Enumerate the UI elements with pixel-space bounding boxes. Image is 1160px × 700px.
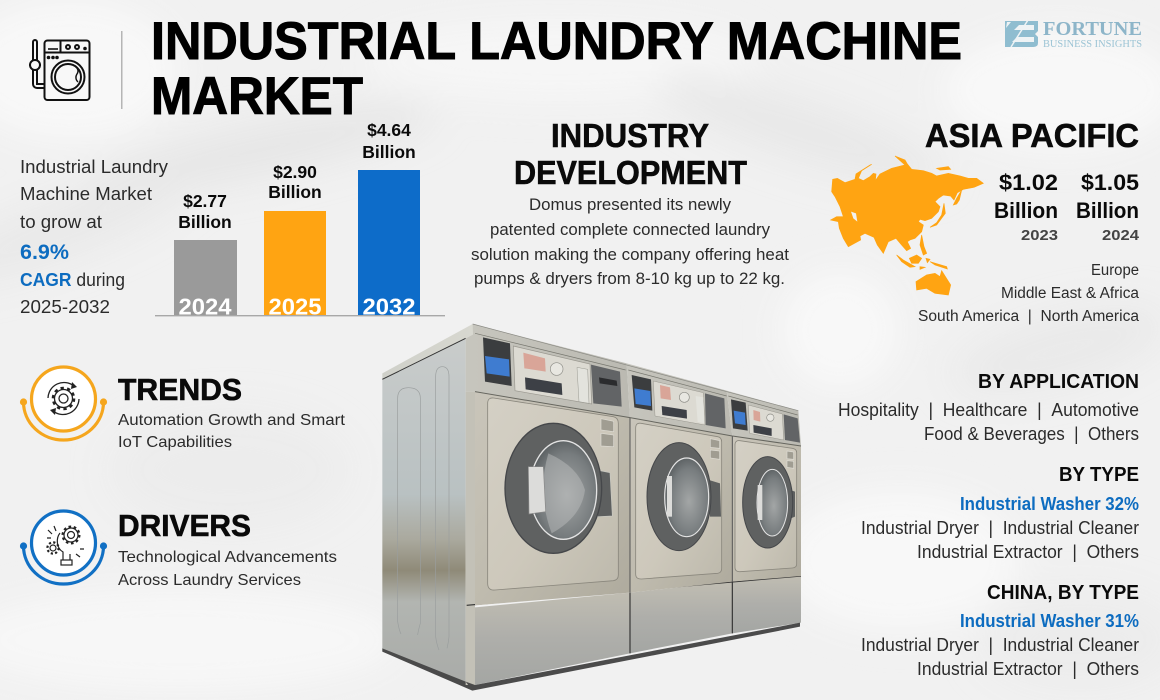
text block: market growth: Machine Market — [20, 184, 152, 204]
stat: asia pacific 2024: 2024 — [1102, 227, 1140, 244]
bar: 2032 — [358, 120, 420, 320]
panel: by application: BY APPLICATION — [978, 371, 1139, 393]
illustration: industrial washing machines — [382, 324, 801, 691]
text block: trends — [118, 412, 346, 451]
logo: Fortune Business Insights: FORTUNE — [1043, 18, 1142, 40]
bar: 2025: $2.90 — [273, 162, 317, 182]
title: INDUSTRIAL LAUNDRY MACHINE — [151, 12, 962, 71]
washer base plinth — [466, 576, 801, 691]
text block: industry development: pumps & dryers from 8-10 kg up to 22 kg. — [474, 270, 785, 288]
stat: asia pacific 2023 — [994, 170, 1058, 244]
stat: asia pacific 2023: $1.02 — [999, 170, 1058, 195]
heading: industry development: INDUSTRY — [551, 117, 709, 154]
panel: by application: Food & Beverages | Others — [924, 424, 1139, 444]
text block: other regions: Middle East & Africa — [1001, 285, 1139, 302]
panel: china by type: CHINA, BY TYPE — [987, 582, 1139, 604]
heading: industry development: DEVELOPMENT — [514, 154, 747, 191]
bar: 2025: 2025 — [268, 294, 322, 320]
panel: by type: Industrial Extractor | Others — [917, 542, 1139, 562]
title divider — [121, 31, 122, 109]
bar: 2024: 2024 — [178, 294, 232, 320]
title — [151, 12, 962, 126]
stat: asia pacific 2023: Billion — [994, 198, 1058, 223]
title: MARKET — [151, 67, 363, 126]
logo: Fortune Business Insights: BUSINESS INSIGHTS — [1043, 38, 1142, 50]
bar: 2032: Billion — [362, 142, 416, 162]
washer door 1 — [505, 423, 612, 553]
logo: Fortune Business Insights — [1005, 18, 1142, 50]
stat: asia pacific 2024 — [1076, 170, 1140, 244]
text block: other regions — [918, 262, 1139, 325]
panel: china by type: Industrial Dryer | Industrial Cleaner — [861, 635, 1139, 655]
bar: 2024: Billion — [178, 212, 232, 232]
stat: asia pacific 2024: Billion — [1076, 198, 1139, 223]
text block: drivers: Technological Advancements — [118, 549, 337, 566]
text block: market growth: to grow at — [20, 212, 102, 232]
text block: industry development — [471, 196, 789, 288]
text block: industry development: solution making the company offering heat — [471, 246, 789, 264]
bar: 2032: 2032 — [362, 294, 416, 320]
icon: trends — [20, 367, 107, 440]
panel: china by type: Industrial Washer 31% — [960, 611, 1139, 631]
text block: trends: Automation Growth and Smart — [118, 412, 346, 429]
bar: 2024: $2.77 — [183, 191, 227, 211]
text block: trends: IoT Capabilities — [118, 434, 232, 451]
text block: market growth: CAGR during — [20, 270, 125, 290]
text block: industry development: patented complete connected laundry — [490, 221, 771, 239]
text block: drivers: Across Laundry Services — [118, 572, 301, 589]
heading: trends: TRENDS — [118, 372, 242, 407]
heading: drivers: DRIVERS — [118, 508, 251, 543]
washer cabinet side — [382, 324, 475, 691]
heading: industry development — [514, 117, 747, 191]
stat: asia pacific 2024: $1.05 — [1081, 170, 1139, 195]
washer control panels — [473, 324, 801, 468]
text block: other regions: South America | North America — [918, 308, 1139, 325]
panel: china by type: Industrial Extractor | Others — [917, 659, 1139, 679]
text block: drivers — [118, 549, 337, 589]
stat: asia pacific 2023: 2023 — [1021, 227, 1058, 244]
washer door 3 — [743, 457, 795, 548]
text block: market growth: 6.9% — [20, 241, 69, 264]
icon: drivers — [20, 511, 107, 584]
icon: washing machine — [29, 40, 90, 100]
bar: 2025: Billion — [268, 182, 322, 202]
heading: asia pacific: ASIA PACIFIC — [925, 117, 1139, 154]
bar: 2024 — [174, 191, 237, 320]
washer door 2 — [647, 443, 721, 551]
bar: 2025 — [264, 162, 326, 320]
text block: industry development: Domus presented its newly — [529, 196, 732, 214]
panel: by application — [838, 371, 1139, 444]
panel: china by type — [861, 582, 1139, 679]
panel: by type: BY TYPE — [1059, 464, 1139, 486]
text block: market growth — [20, 157, 168, 317]
text block: other regions: Europe — [1091, 262, 1139, 279]
panel: by type: Industrial Dryer | Industrial Cleaner — [861, 518, 1139, 538]
text block: market growth: Industrial Laundry — [20, 157, 168, 177]
text block: market growth: 2025-2032 — [20, 297, 110, 317]
bar chart — [155, 120, 445, 320]
panel: by type — [861, 464, 1139, 562]
map: asia pacific — [831, 156, 983, 295]
panel: by application: Hospitality | Healthcare | Automotive — [838, 400, 1139, 420]
washer front panels — [475, 392, 801, 605]
bar: 2032: $4.64 — [367, 120, 411, 140]
panel: by type: Industrial Washer 32% — [960, 494, 1139, 514]
